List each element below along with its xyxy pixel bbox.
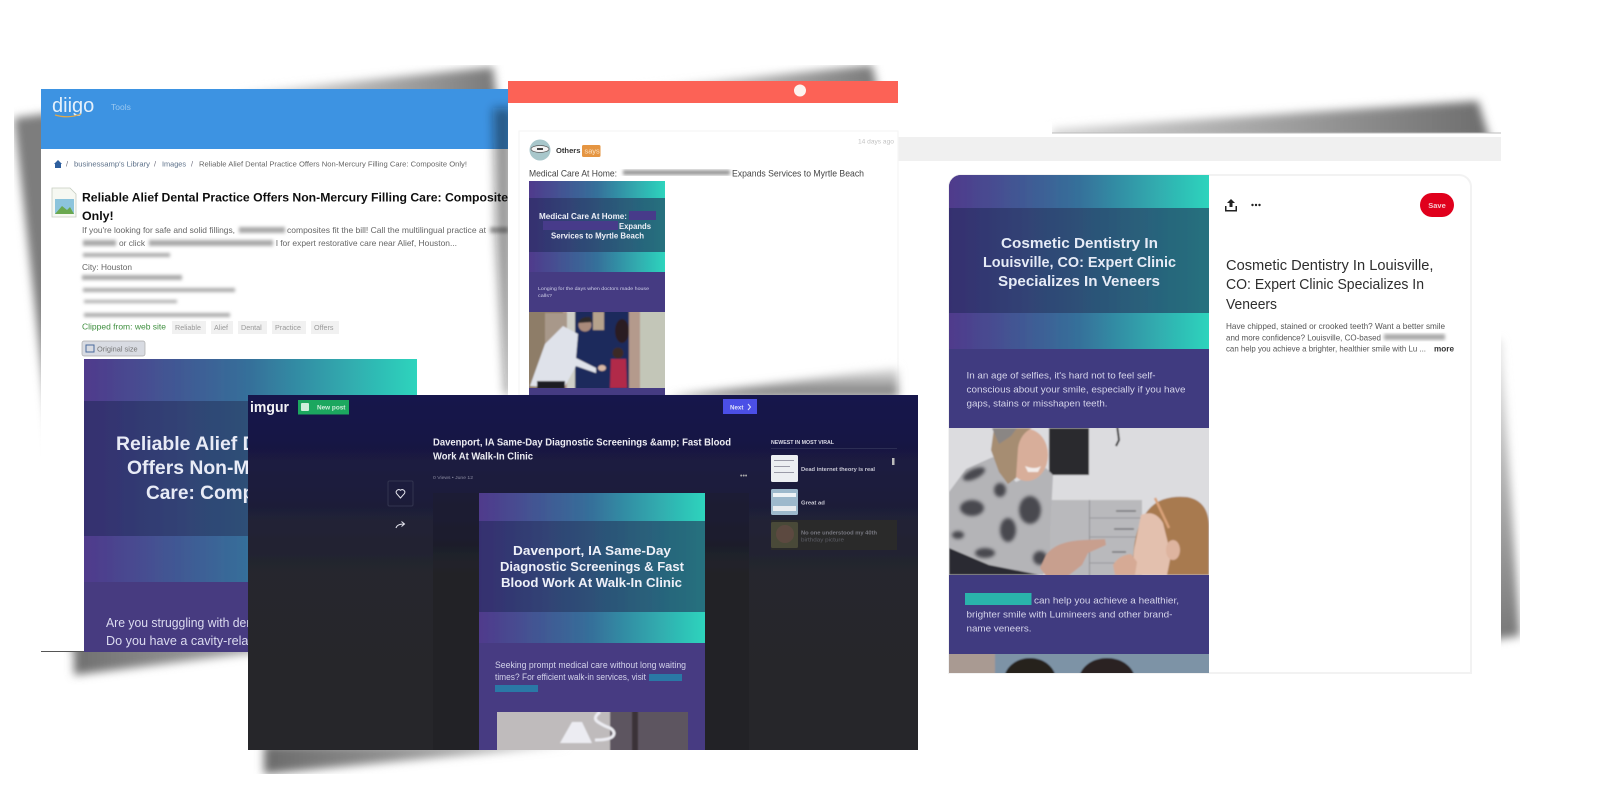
says badge [582,145,600,157]
icon: more dots [1251,204,1261,206]
post meta: 0 Views • June 12 [433,475,473,481]
embedded infographic image: Blood Work At Walk-In Clinic [501,575,682,590]
imgur logo: imgur [250,400,289,416]
embedded infographic image: Expands [619,222,652,231]
icon: avatar [530,140,550,160]
infographic image [945,175,1213,702]
embedded infographic image: Diagnostic Screenings & Fast [500,559,685,574]
image closing text [967,597,1178,632]
breadcrumb: Reliable Alief Dental Practice Offers Non-Mercury Filling Care: Composite Only! [199,160,467,168]
photo: second image strip [949,654,1209,673]
breadcrumb: Images [162,160,186,168]
image intro text: conscious about your smile, especially if you have [966,384,1186,396]
sidebar item 2: Great ad [801,500,825,506]
post title: Davenport, IA Same-Day Diagnostic Screenings &amp; Fast Blood [433,438,731,448]
embedded infographic image: Offers Non-Mercury Filling [127,458,371,479]
next button: Next [730,404,743,412]
sidebar item 1: Dead internet theory is real [801,467,875,473]
icon: share [1225,199,1237,212]
embedded infographic image: Care: Composite Only! [146,483,353,504]
nav link: Tools [111,102,131,112]
new post button: New post [317,404,346,412]
image heading [983,235,1176,290]
embedded infographic image: times? For efficient walk-in services, visit [495,672,646,682]
breadcrumb: / [66,160,68,168]
breadcrumb: / [154,160,156,168]
embedded infographic image [525,181,670,395]
top grey bar [898,137,1501,161]
breadcrumb: businessamp's Library [74,160,150,168]
breadcrumb [54,160,467,168]
embedded infographic image: Services to Myrtle Beach [551,232,644,240]
photo: dentist and child [945,424,1213,579]
article description: If you're looking for safe and solid fillings, [82,226,235,235]
embedded infographic image: Longing for the days when doctors made house [538,286,650,291]
article title: Reliable Alief Dental Practice Offers Non-Mercury Filling Care: Composite [82,190,508,204]
embedded infographic image: Medical Care At Home: [539,212,627,221]
photo: medical lamp [497,712,688,750]
panel: imgur post page [248,395,918,754]
clipped-from line and tags: Offers [314,323,334,332]
article description: l for expert restorative care near Alief, Houston... [276,239,457,248]
image heading: Specializes In Veneers [998,273,1160,290]
red header bar [508,81,898,103]
shadow: wedge above imgur panel [667,368,898,397]
embedded infographic image: calls? [538,293,553,298]
sidebar item 3: birthday picture [801,538,845,544]
embedded infographic image [479,493,705,754]
diigo header bar [41,89,508,149]
highlighted clinic name [965,593,1032,605]
image closing text: brighter smile with Lumineers and other brand- [966,610,1172,620]
shadow from forum panel onto diigo page [493,108,512,395]
post title [433,438,731,462]
icon: image file [52,188,76,217]
embedded infographic image: Are you struggling with dental [106,615,266,630]
pin card [945,175,1471,702]
author name: Others [556,146,580,155]
post text: Expands Services to Myrtle Beach [732,168,864,178]
clipped-from line and tags: Dental [241,323,262,332]
pin description: more [1434,344,1454,354]
shadow: diigo panel left [14,112,90,658]
article description: composites fit the bill! Call the multilingual practice at [287,226,487,235]
sidebar: newest in most viral: NEWEST IN MOST VIRAL [771,440,834,446]
pin description: can help you achieve a brighter, healthier smile with Lu ... [1226,344,1426,354]
image closing text: name veneers. [966,624,1032,634]
panel: forum post page [508,81,898,395]
highlighted clinic links [495,674,682,692]
embedded infographic image: Seeking prompt medical care without long waiting [495,660,686,670]
clipped-from line and tags: Alief [214,323,228,332]
article description [82,226,487,272]
image intro text: In an age of selfies, it's hard not to feel self- [966,370,1156,382]
article title: Only! [82,209,114,223]
embedded infographic image: Reliable Alief Dental Practice [116,434,383,455]
original size button [82,341,145,356]
pin description: and more confidence? Louisville, CO-based [1226,334,1381,342]
post card [519,131,898,395]
redacted details [82,227,508,317]
image intro text [966,370,1186,410]
next button [723,399,757,414]
shadow: imgur panel [264,745,570,774]
shadow: forum panel top [630,65,878,90]
image intro text: gaps, stains or misshapen teeth. [966,398,1108,410]
pin heading [1226,258,1434,313]
clipped-from line and tags: Reliable [175,323,201,332]
sidebar item 3 [771,520,897,550]
pin description [1226,322,1454,354]
panel: pinterest pin page [898,122,1501,702]
icon: heart button [388,481,413,506]
clipped-from line and tags: Clipped from: web site [82,322,166,332]
image closing text: can help you achieve a healthier, [1034,596,1179,606]
embedded infographic image [84,359,417,652]
image heading: Cosmetic Dentistry In [1001,235,1158,252]
icon: share arrow [396,522,404,528]
sidebar: newest in most viral [771,440,897,550]
shadow: pinterest panel right [1490,340,1520,640]
diigo logo: diigo [52,95,94,117]
save button: Save [1428,201,1446,210]
says badge: says [584,146,600,156]
article column [433,493,749,750]
pin heading: Veneers [1226,297,1277,313]
clipped-from line and tags [82,321,339,334]
pin heading: Cosmetic Dentistry In Louisville, [1226,258,1434,274]
breadcrumb: / [191,160,193,168]
shadow: pinterest panel top [1052,101,1490,140]
sidebar item 3: No one understood my 40th [801,530,877,536]
new post button [298,400,349,414]
image heading: Louisville, CO: Expert Clinic [983,254,1176,271]
timestamp: 14 days ago [858,138,894,146]
pin heading: CO: Expert Clinic Specializes In [1226,277,1424,293]
clipped-from line and tags: Practice [275,323,301,332]
post text: Medical Care At Home: [529,168,617,178]
embedded infographic image: Davenport, IA Same-Day [513,543,672,558]
more dots: ••• [740,473,748,480]
white header dot [794,84,806,96]
shadow: diigo panel bottom [74,640,262,675]
article title [82,190,508,223]
article description: City: Houston [82,263,132,272]
pin description: Have chipped, stained or crooked teeth? Want a better smile [1226,322,1445,331]
original size button: Original size [97,344,138,354]
shadow: diigo panel top [240,67,497,100]
save button [1420,193,1454,217]
post title: Work At Walk-In Clinic [433,452,533,462]
photo: doctor house call [529,312,665,388]
embedded infographic image: Do you have a cavity-related [106,633,266,648]
post text [529,168,864,178]
panel: diigo library page [41,89,508,652]
article description: or click [119,239,146,248]
